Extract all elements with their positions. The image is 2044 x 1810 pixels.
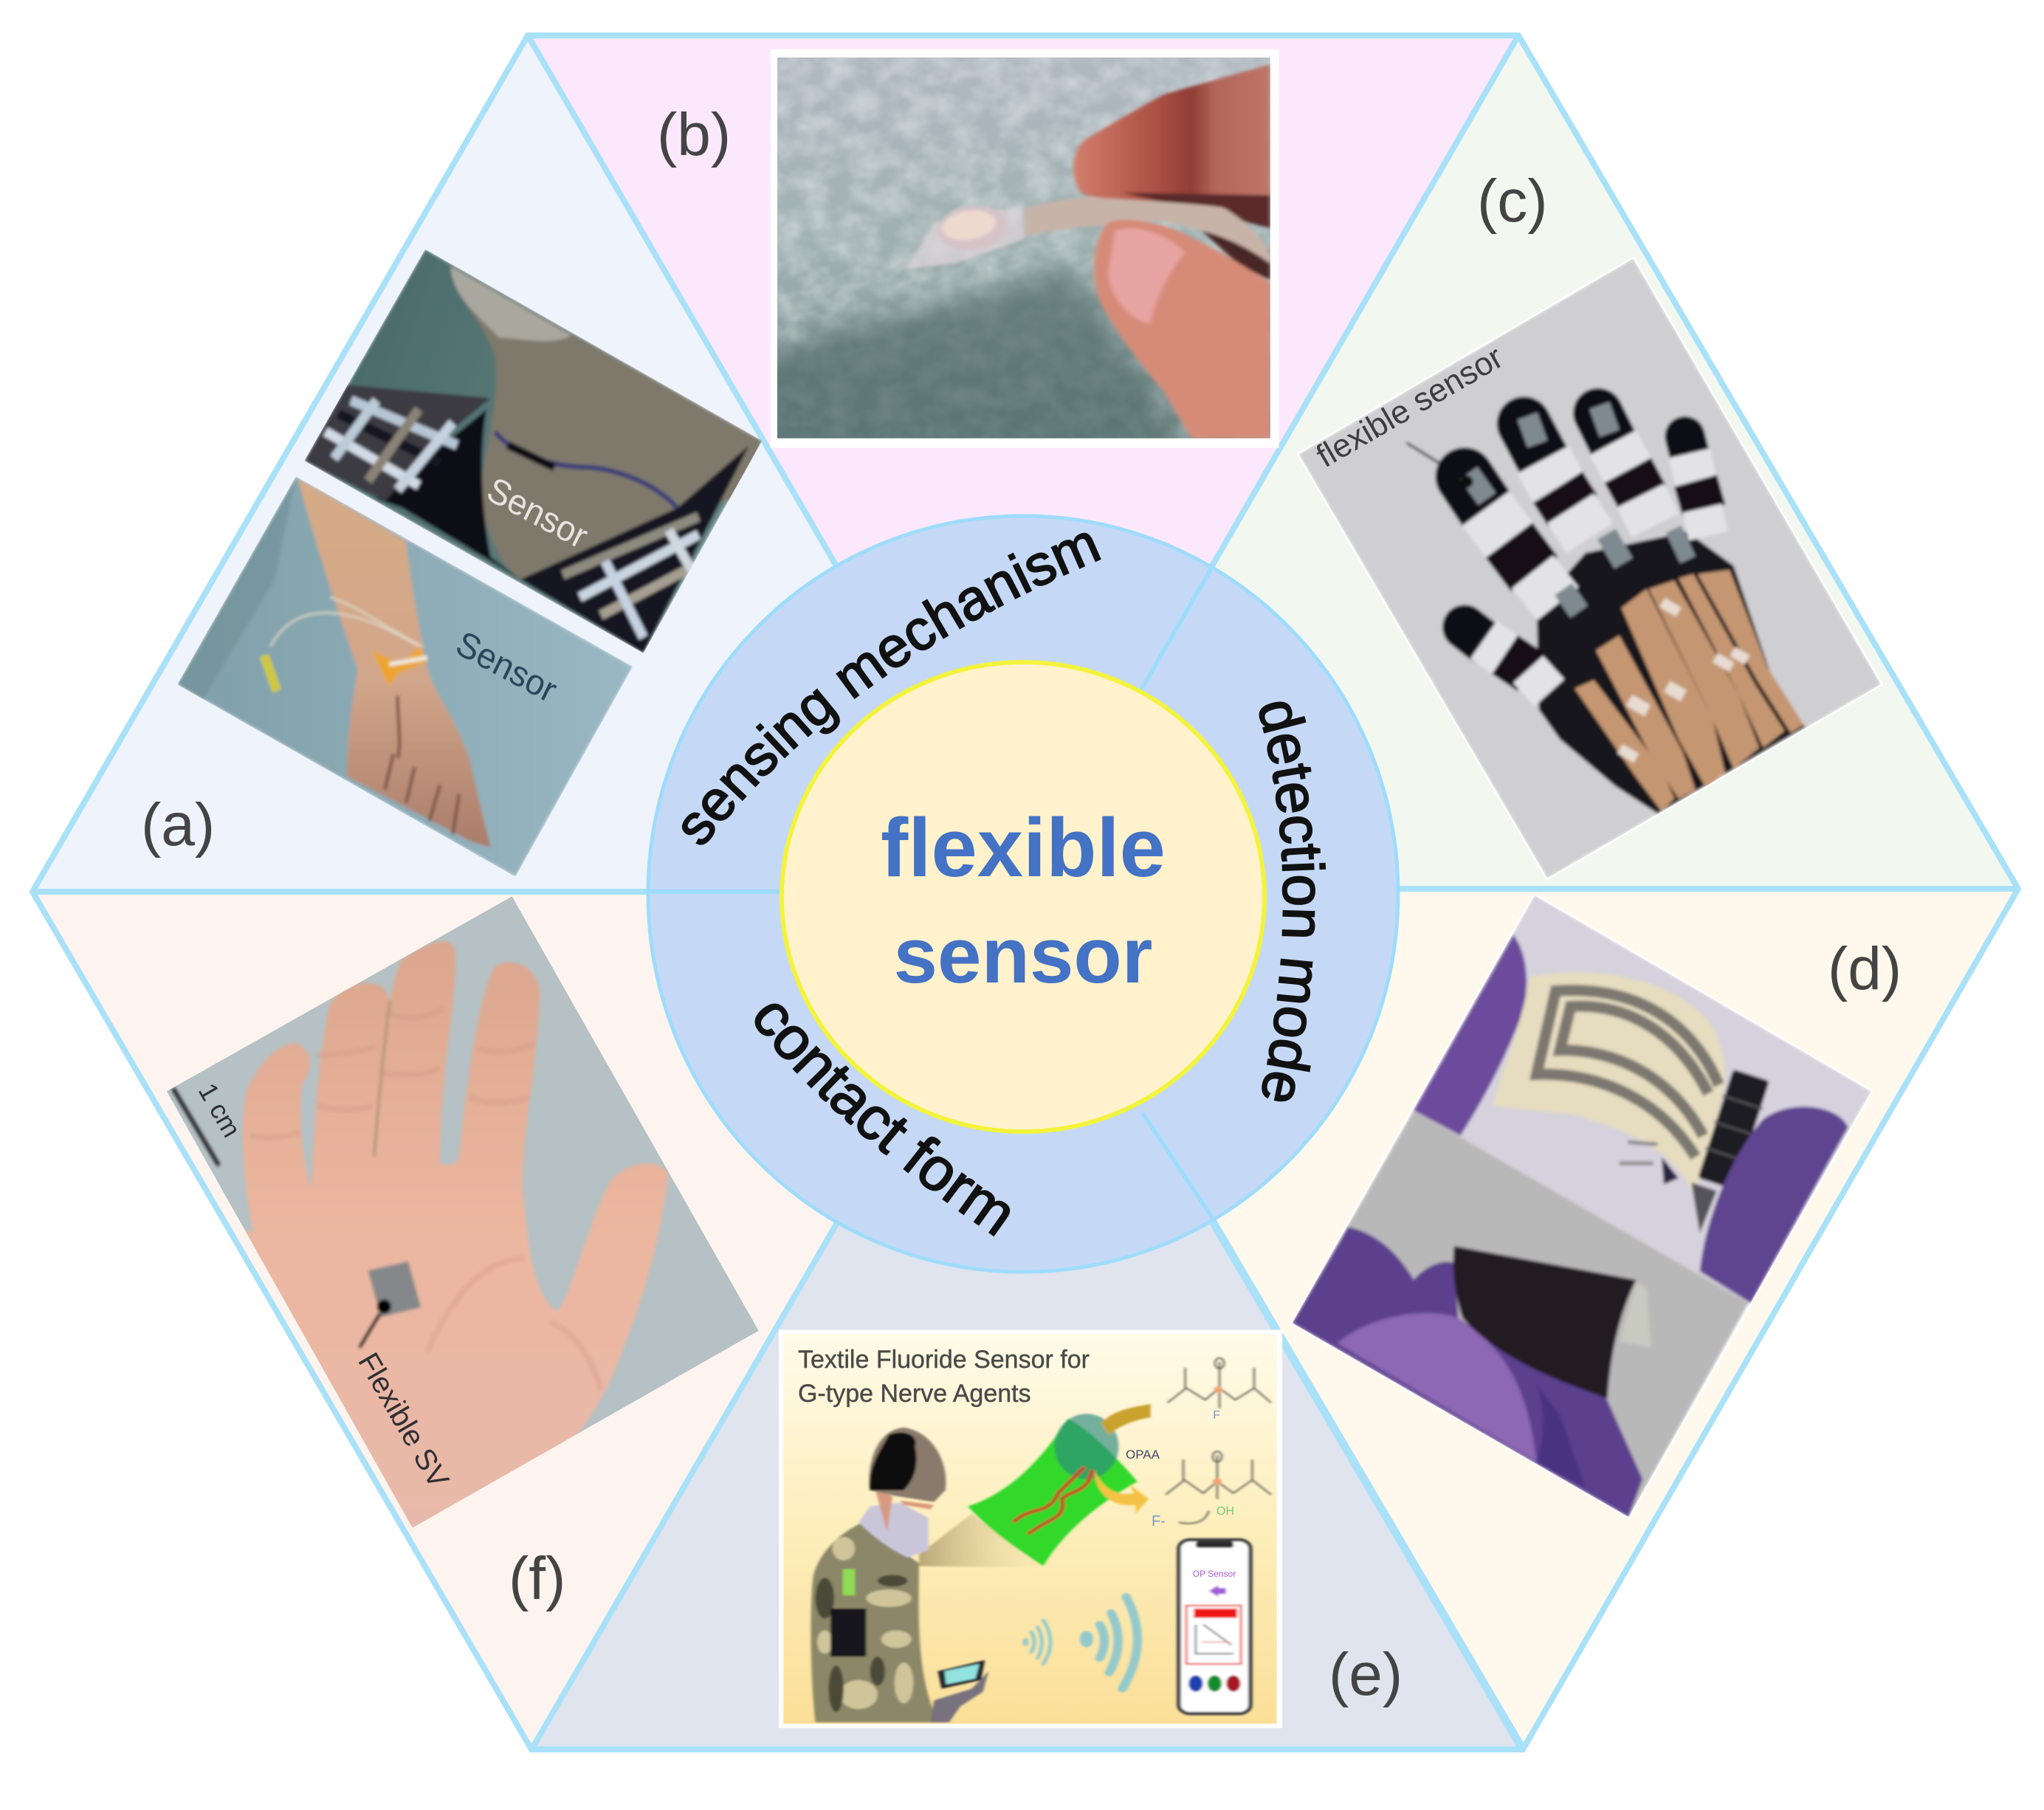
heading text inside photo (e): Textile Fluoride Sensor for [798,1346,1090,1374]
copper strips [1575,570,1803,811]
textile patch [968,1419,1138,1566]
panel: (d) sector background [1023,889,2018,1749]
photo (a): neck and wrist sensors [177,250,762,877]
panel: (f) sector background [32,892,1023,1749]
photo (c): sensor glove [1298,258,1881,878]
ring label: detection mode: detection mode [1259,701,1326,1101]
photo (e): textile fluoride sensor [779,1329,1282,1728]
photo (f): hand with flexible SV sensor [167,896,759,1534]
panel: (e) sector background [531,892,1523,1749]
outer ring [648,516,1398,1272]
wireless waves [1031,1597,1138,1689]
label (b): (b) [657,101,731,168]
inner circle [782,662,1264,1132]
label (c): (c) [1477,168,1548,235]
fingers [1465,413,1708,692]
molecules [1166,1362,1271,1524]
label: F: F [1213,1409,1220,1422]
label (d): (d) [1828,935,1902,1002]
label: OPAA: OPAA [1126,1448,1160,1462]
photo (b): translucent sensor held by fingers [771,49,1279,448]
glove palm [1537,531,1806,813]
sector labels [141,101,1902,1708]
ring label: contact form: contact form [754,1004,1010,1237]
label: OP Sensor on phone: OP Sensor [1193,1569,1236,1579]
panel: (a) sector background [32,35,1023,892]
label (a): (a) [141,791,215,858]
label: Sensor on neck: Sensor [481,469,593,557]
label (e): (e) [1329,1641,1403,1708]
label: flexible sensor: flexible sensor [1310,339,1509,475]
label: OH: OH [1217,1505,1234,1518]
photo: neck sensor [304,250,762,653]
photo (d): flexible printed sensor in purple gloves [1293,895,1871,1517]
photo: wrist sensor [177,476,633,877]
panel: (b) sector background [528,35,1518,892]
smartphone [1179,1540,1250,1713]
panel: (c) sector background [1023,35,2018,892]
label (f): (f) [509,1545,565,1612]
label: Sensor on wrist: Sensor [450,624,563,711]
label: Flexible SV: Flexible SV [351,1347,455,1494]
soldier [919,1514,1043,1568]
ring label: sensing mechanism: sensing mechanism [682,533,1101,845]
title: flexible sensor [881,802,1166,999]
label: 1 cm scale: 1 cm [193,1078,247,1142]
ring dividers [648,567,1214,1219]
photo (e): textile fluoride sensor: G-type Nerve Agents [798,1380,1031,1408]
label: F-: F- [1152,1513,1166,1529]
title: flexible sensor: sensor [894,911,1152,999]
title: flexible sensor: flexible [881,802,1166,894]
